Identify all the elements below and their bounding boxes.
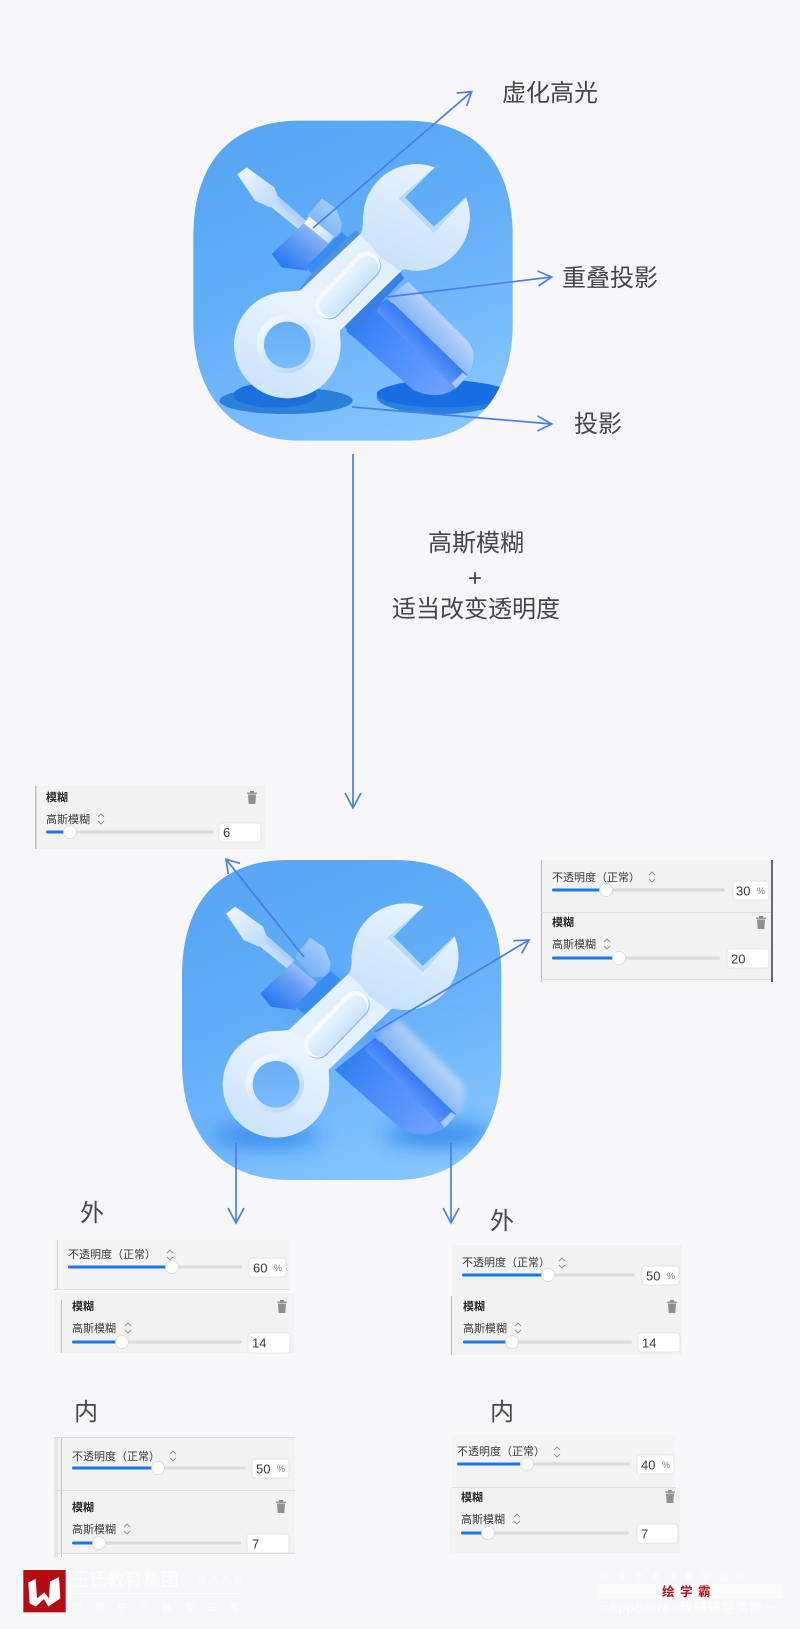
arrow: main flow down (345, 454, 361, 808)
footer: left brand watermark: 王氏教育集团 (71, 1570, 179, 1590)
arrow: to blurred highlight (313, 92, 472, 228)
panel: opacity 30 blur 20: 高斯模糊 (552, 937, 596, 951)
panel: opacity 30 blur 20: % (757, 886, 765, 896)
panel: inner opacity 40 blur 7: 40 (641, 1458, 655, 1472)
panel: inner opacity 50 blur 7 (54, 1437, 295, 1557)
arrow: to overlapping shadow (387, 271, 552, 297)
panel: outer opacity 50 blur 14 (451, 1245, 682, 1355)
label: inner left: 内 (74, 1399, 98, 1426)
panel: inner opacity 50 blur 7: 模糊 (72, 1500, 94, 1514)
panel: outer opacity 60 blur 14: 模糊 (72, 1299, 94, 1313)
panel: outer opacity 50 blur 14: 高斯模糊 (463, 1321, 507, 1335)
footer: left brand watermark (71, 1570, 252, 1614)
text block: gaussian blur plus opacity: 高斯模糊 (428, 530, 524, 557)
arrow: to overlap shadow panel (375, 940, 529, 1032)
arrow: right shadow down (443, 1143, 459, 1223)
panel: outer opacity 50 blur 14: 14 (642, 1336, 656, 1350)
footer: right brand watermark: =AppStore=教辅辅导类第一 (600, 1600, 777, 1615)
label: inner right: 内 (490, 1399, 514, 1426)
panel: inner opacity 40 blur 7: 7 (641, 1526, 648, 1542)
label: outer left: 外 (80, 1200, 104, 1227)
panel: opacity 30 blur 20: 30 (736, 884, 750, 898)
panel: inner opacity 40 blur 7: 不透明度（正常） (457, 1444, 545, 1458)
footer: right brand watermark: 百度艺术生教辅品牌 (600, 1571, 753, 1582)
panel: inner opacity 50 blur 7: % (277, 1464, 285, 1474)
label: blurred highlight: 虚化高光 (502, 80, 598, 107)
icon: source tools icon with hard shadows (193, 121, 513, 441)
logo: red W mark (23, 1570, 66, 1612)
panel: inner opacity 50 blur 7: 高斯模糊 (72, 1522, 116, 1536)
panel: inner opacity 50 blur 7: 7 (252, 1536, 259, 1552)
panel: outer opacity 60 blur 14: 不透明度（正常） (68, 1247, 156, 1261)
panel: inner opacity 50 blur 7: 50 (256, 1462, 270, 1476)
arrow: to highlight blur panel (226, 859, 304, 957)
panel: blur 6: 模糊 (46, 790, 68, 804)
panel: blur 6: 高斯模糊 (46, 812, 90, 826)
footer: right brand watermark (598, 1571, 782, 1615)
footer: right brand watermark: 绘学霸 (662, 1584, 716, 1599)
arrow: to shadow (352, 407, 552, 431)
label: outer right: 外 (490, 1208, 514, 1235)
panel: outer opacity 60 blur 14: 60 (253, 1260, 267, 1276)
label: overlapping shadow: 重叠投影 (562, 265, 658, 292)
panel: opacity 30 blur 20: 不透明度（正常） (552, 870, 640, 884)
panel: opacity 30 blur 20: 模糊 (552, 915, 574, 929)
footer: left brand watermark: 让人人生 (197, 1573, 245, 1586)
panel: outer opacity 50 blur 14: 50 (646, 1268, 660, 1284)
panel: inner opacity 40 blur 7: 高斯模糊 (461, 1512, 505, 1526)
panel: outer opacity 50 blur 14: 不透明度（正常） (462, 1255, 550, 1269)
arrow: left shadow down (228, 1143, 244, 1223)
text block: gaussian blur plus opacity (392, 530, 560, 623)
panel: outer opacity 60 blur 14 (54, 1240, 294, 1353)
label: shadow: 投影 (574, 411, 622, 438)
footer: left brand watermark: 教育平三教育三年 (72, 1601, 252, 1614)
panel: opacity 30 blur 20: 20 (731, 952, 745, 966)
panel: outer opacity 60 blur 14: 高斯模糊 (72, 1321, 116, 1335)
text block: gaussian blur plus opacity: + (468, 565, 482, 592)
panel: inner opacity 40 blur 7: 模糊 (461, 1490, 483, 1504)
panel: outer opacity 50 blur 14: 模糊 (463, 1299, 485, 1313)
panel: outer opacity 50 blur 14: % (667, 1271, 675, 1281)
text block: gaussian blur plus opacity: 适当改变透明度 (392, 596, 560, 623)
panel: outer opacity 60 blur 14: 14 (252, 1336, 266, 1350)
icon: result tools icon with blurred shadows (182, 860, 501, 1180)
panel: opacity 30 blur 20 (541, 860, 773, 982)
panel: inner opacity 40 blur 7 (450, 1435, 680, 1553)
panel: blur 6 (35, 786, 265, 849)
panel: outer opacity 60 blur 14: % (274, 1263, 282, 1273)
panel: inner opacity 50 blur 7: 不透明度（正常） (72, 1449, 160, 1463)
panel: inner opacity 40 blur 7: % (662, 1460, 670, 1470)
panel: blur 6: 6 (223, 825, 230, 840)
